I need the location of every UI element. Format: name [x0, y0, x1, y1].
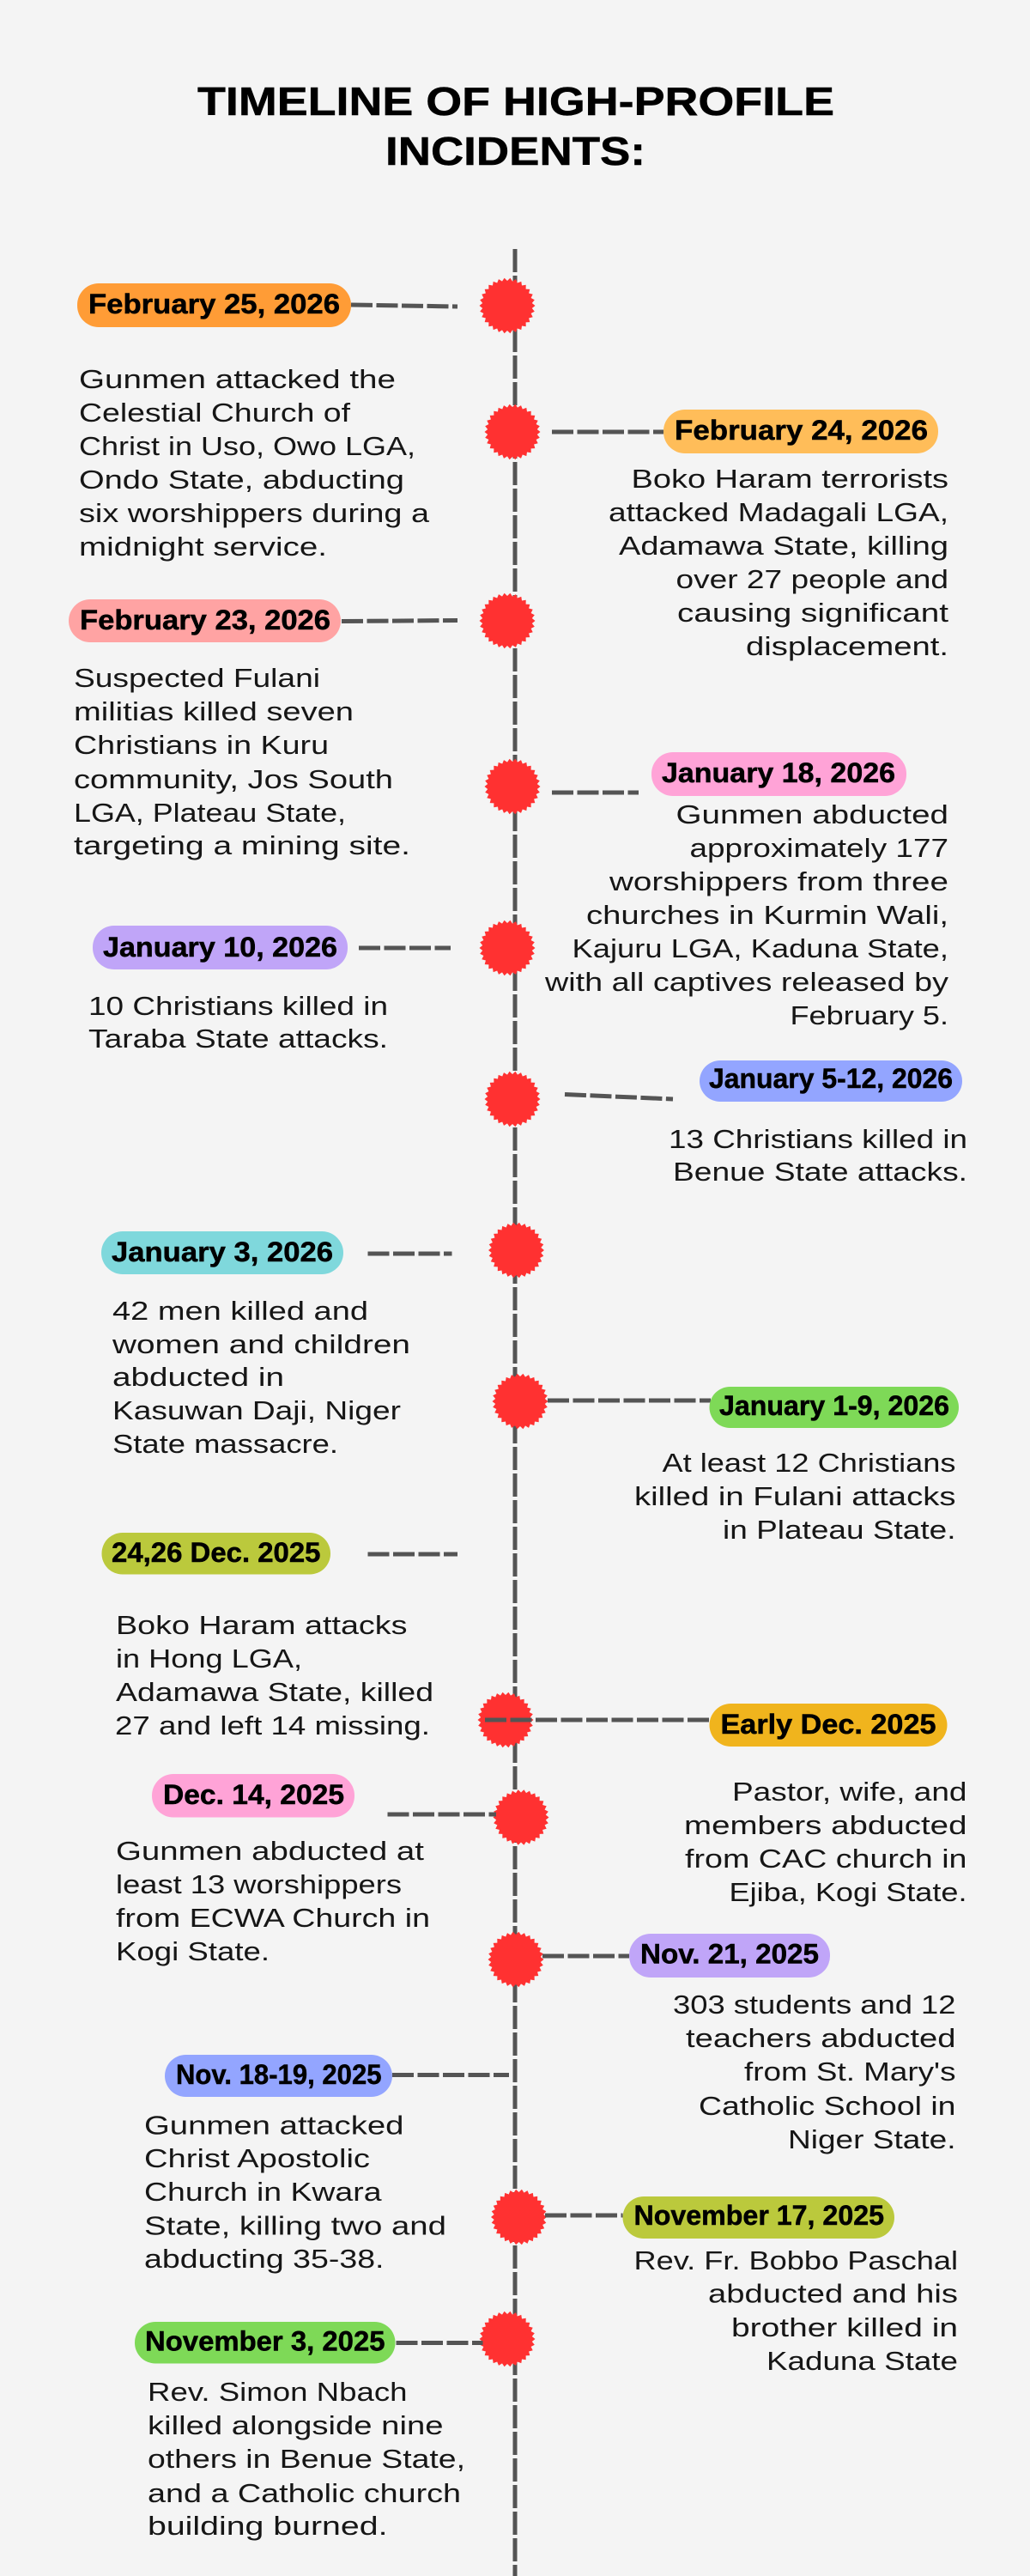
description	[673, 1990, 956, 2154]
event: November 17, 2025	[491, 2190, 958, 2376]
marker	[479, 593, 536, 648]
description: in Hong LGA,	[116, 1643, 302, 1674]
connector	[565, 1094, 673, 1099]
date pill	[663, 410, 938, 453]
date pill: 24,26 Dec. 2025	[112, 1537, 321, 1568]
description	[88, 991, 388, 1054]
description: Boko Haram attacks	[116, 1610, 407, 1640]
marker	[484, 404, 541, 459]
description	[609, 464, 948, 661]
description: community, Jos South	[74, 764, 393, 794]
description: killed in Fulani attacks	[634, 1481, 956, 1511]
marker	[477, 1692, 534, 1747]
marker	[479, 278, 536, 333]
event: Dec. 14, 2025	[116, 1774, 549, 1966]
description: State massacre.	[112, 1429, 338, 1459]
description: Niger State.	[788, 2124, 956, 2154]
connector	[552, 429, 663, 434]
description	[116, 1836, 430, 1966]
date pill	[77, 283, 351, 327]
marker	[484, 759, 541, 814]
description: displacement.	[746, 631, 948, 661]
event: February 23, 2026	[69, 593, 536, 860]
title: INCIDENTS:	[385, 129, 645, 173]
description: from ECWA Church in	[116, 1903, 430, 1933]
date pill	[101, 1533, 330, 1575]
description	[669, 1124, 967, 1187]
date pill: November 3, 2025	[145, 2325, 385, 2356]
description: Kasuwan Daji, Niger	[112, 1395, 401, 1425]
date pill: Nov. 21, 2025	[640, 1939, 819, 1970]
marker	[493, 1789, 549, 1845]
description: Gunmen attacked the	[79, 364, 396, 394]
connector	[552, 790, 639, 795]
event: November 3, 2025	[135, 2312, 536, 2541]
date pill	[69, 599, 341, 642]
description: Ejiba, Kogi State.	[730, 1877, 966, 1907]
title: TIMELINE OF HIGH-PROFILE	[197, 79, 834, 124]
date pill	[135, 2322, 395, 2363]
marker	[491, 2190, 547, 2245]
date pill: January 10, 2026	[103, 932, 337, 963]
description: and a Catholic church	[148, 2478, 461, 2508]
event: February 24, 2026	[484, 404, 948, 661]
date pill	[165, 2055, 392, 2097]
connector	[548, 1398, 711, 1403]
description	[74, 663, 410, 860]
description: LGA, Plateau State,	[74, 798, 346, 828]
description: abducted and his	[708, 2279, 958, 2308]
description: Taraba State attacks.	[88, 1024, 388, 1054]
description: Ondo State, abducting	[79, 465, 404, 495]
description: in Plateau State.	[723, 1515, 956, 1545]
description: from St. Mary's	[744, 2057, 956, 2087]
description: Kogi State.	[116, 1936, 270, 1966]
description: building burned.	[148, 2511, 388, 2541]
date pill	[101, 1231, 343, 1274]
connector	[367, 1552, 457, 1556]
date pill	[623, 2196, 894, 2239]
description: Catholic School in	[699, 2091, 956, 2121]
description: least 13 worshippers	[116, 1869, 402, 1899]
description: Boko Haram terrorists	[632, 464, 948, 494]
description: killed alongside nine	[148, 2410, 443, 2440]
event: January 10, 2026	[88, 920, 536, 1054]
description: causing significant	[677, 598, 948, 628]
description: Rev. Simon Nbach	[148, 2377, 407, 2407]
description: over 27 people and	[676, 564, 948, 594]
marker	[488, 1223, 544, 1278]
description: 303 students and 12	[673, 1990, 956, 2020]
connector	[485, 1717, 709, 1722]
connector	[342, 620, 457, 622]
marker	[493, 1374, 548, 1429]
date pill	[709, 1704, 948, 1747]
event: Nov. 21, 2025	[488, 1932, 956, 2154]
description: abducting 35-38.	[144, 2244, 385, 2274]
date pill: February 24, 2026	[675, 415, 928, 446]
description	[544, 799, 949, 1030]
date pill: January 5-12, 2026	[709, 1063, 953, 1094]
description: Benue State attacks.	[673, 1157, 967, 1187]
connector	[359, 946, 451, 950]
event: Nov. 18-19, 2025	[144, 2055, 509, 2274]
date pill: Dec. 14, 2025	[163, 1779, 344, 1810]
description: Gunmen abducted at	[116, 1836, 424, 1866]
connector	[397, 2341, 482, 2345]
description: State, killing two and	[144, 2210, 446, 2241]
description: Gunmen abducted	[676, 799, 948, 829]
event: February 25, 2026	[77, 278, 536, 562]
timeline spine	[513, 249, 517, 2576]
description: from CAC church in	[685, 1844, 966, 1874]
description	[115, 1610, 433, 1741]
connector	[542, 1954, 629, 1958]
description: women and children	[112, 1329, 410, 1359]
description: teachers abducted	[686, 2023, 956, 2053]
date pill	[651, 752, 906, 796]
date pill	[152, 1774, 354, 1817]
description: 42 men killed and	[112, 1296, 368, 1326]
description	[79, 364, 430, 562]
description: Kaduna State	[766, 2346, 958, 2376]
date pill: January 18, 2026	[662, 757, 895, 788]
date pill: Nov. 18-19, 2025	[176, 2059, 381, 2090]
date pill: Early Dec. 2025	[721, 1709, 936, 1740]
description: Christ Apostolic	[144, 2143, 370, 2173]
description	[144, 2111, 446, 2274]
description	[634, 1448, 956, 1545]
description	[112, 1296, 410, 1459]
description: Christ in Uso, Owo LGA,	[79, 431, 415, 461]
date pill	[629, 1934, 830, 1978]
marker	[484, 1072, 541, 1127]
description: Christians in Kuru	[74, 730, 329, 760]
event: 24,26 Dec. 2025	[101, 1533, 457, 1741]
date pill	[93, 926, 348, 969]
description	[633, 2245, 958, 2376]
marker	[479, 920, 536, 975]
description: Rev. Fr. Bobbo Paschal	[633, 2245, 958, 2275]
description: February 5.	[790, 1000, 948, 1030]
description: 27 and left 14 missing.	[115, 1710, 430, 1741]
description: brother killed in	[731, 2312, 958, 2342]
description: Celestial Church of	[79, 398, 350, 428]
date pill: February 23, 2026	[80, 605, 330, 635]
description: targeting a mining site.	[74, 830, 410, 860]
connector	[392, 2073, 509, 2077]
description: approximately 177	[690, 833, 948, 863]
connector	[367, 1252, 451, 1255]
event: Early Dec. 2025	[477, 1692, 966, 1907]
description: Adamawa State, killed	[116, 1677, 433, 1707]
description: Gunmen attacked	[144, 2111, 403, 2140]
description: others in Benue State,	[148, 2444, 465, 2474]
event: January 18, 2026	[484, 752, 949, 1030]
connector	[388, 1812, 496, 1817]
description: with all captives released by	[544, 967, 949, 997]
description: abducted in	[112, 1362, 284, 1392]
date pill: January 3, 2026	[112, 1236, 333, 1267]
connector	[545, 2214, 623, 2217]
event: January 3, 2026	[101, 1223, 544, 1459]
title	[197, 79, 834, 173]
description: 13 Christians killed in	[669, 1124, 967, 1154]
date pill: January 1-9, 2026	[719, 1390, 949, 1421]
description: worshippers from three	[609, 866, 948, 896]
description: Adamawa State, killing	[619, 531, 948, 561]
description: members abducted	[684, 1810, 966, 1840]
description: militias killed seven	[74, 696, 354, 726]
description	[148, 2377, 465, 2541]
date pill: February 25, 2026	[88, 289, 340, 319]
description: attacked Madagali LGA,	[609, 497, 948, 527]
date pill	[700, 1060, 962, 1102]
event: January 1-9, 2026	[493, 1374, 959, 1545]
description: six worshippers during a	[79, 498, 430, 528]
date pill: November 17, 2025	[633, 2200, 884, 2231]
description: At least 12 Christians	[663, 1448, 956, 1478]
description	[684, 1777, 966, 1907]
marker	[479, 2312, 536, 2366]
date pill	[709, 1387, 959, 1428]
event: January 5-12, 2026	[484, 1060, 967, 1187]
description: Church in Kwara	[144, 2177, 382, 2207]
connector	[351, 305, 457, 307]
description: Suspected Fulani	[74, 663, 320, 693]
description: Kajuru LGA, Kaduna State,	[572, 933, 948, 963]
description: midnight service.	[79, 532, 327, 562]
description: 10 Christians killed in	[88, 991, 388, 1021]
description: Pastor, wife, and	[732, 1777, 966, 1807]
marker	[488, 1932, 544, 1987]
description: churches in Kurmin Wali,	[586, 900, 948, 930]
